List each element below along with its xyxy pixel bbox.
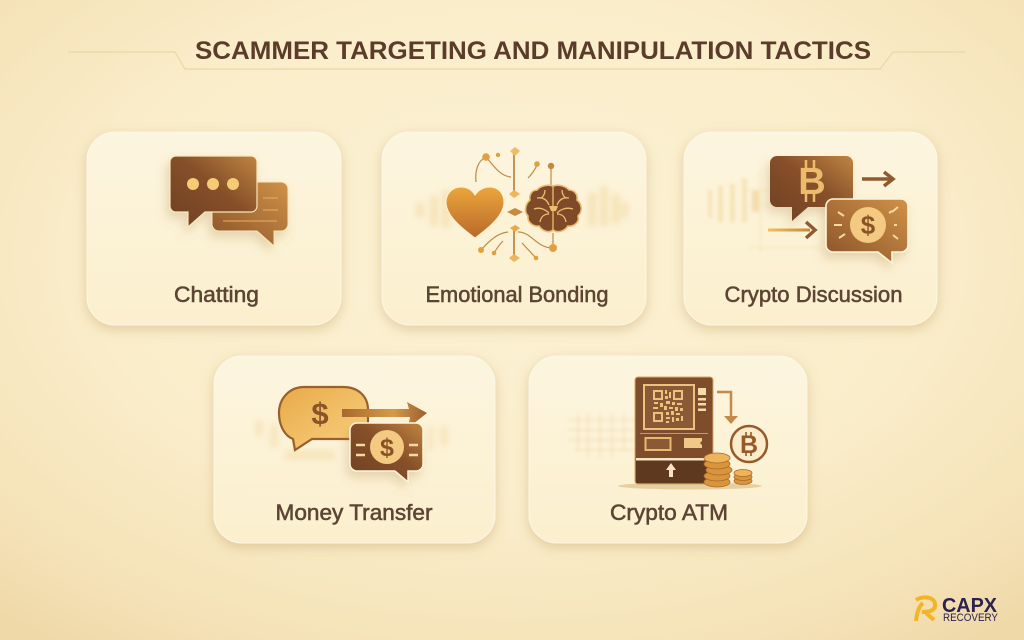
arrow: transfer (342, 402, 427, 428)
icon: gold dollar bubble (279, 387, 368, 450)
label: money transfer: Money Transfer (276, 500, 432, 525)
decorative grid (568, 413, 635, 458)
decorative glow waves (416, 186, 628, 228)
logo: capx recovery (916, 595, 999, 624)
panel: crypto discussion (684, 132, 937, 325)
decorative glow waves (255, 420, 448, 460)
heart (446, 187, 504, 238)
arrow: right top (862, 172, 893, 186)
qr code (653, 390, 683, 423)
icon: bitcoin coin: B (740, 431, 758, 459)
icon: coin stacks (704, 453, 752, 487)
label: chatting: Chatting (174, 282, 259, 307)
icon: gold dollar bubble: $ (311, 396, 329, 431)
panel: crypto atm (529, 356, 807, 543)
title banner (68, 37, 965, 69)
label: emotional bonding: Emotional Bonding (426, 282, 608, 307)
icon: heart and brain network (446, 147, 581, 262)
arrow: right lower (768, 222, 815, 238)
arrow: down (717, 392, 738, 424)
icon: bitcoin bubble: B (798, 161, 826, 203)
icon: dark dollar bubble (350, 423, 423, 482)
label: crypto discussion: Crypto Discussion (724, 282, 902, 307)
panel: chatting (87, 132, 341, 325)
panel: emotional bonding (382, 132, 646, 325)
nodes (478, 147, 557, 262)
label: crypto atm: Crypto ATM (610, 500, 728, 525)
icon: dark dollar bubble: $ (380, 434, 394, 462)
icon: atm machine (635, 377, 713, 484)
logo wordmark: CAPX (942, 595, 998, 617)
logo mark (916, 597, 935, 621)
title: SCAMMER TARGETING AND MANIPULATION TACTICS (195, 37, 871, 65)
logo subtitle: RECOVERY (943, 612, 999, 624)
floor shadow (618, 482, 762, 490)
icon: dollar bubble: $ (861, 210, 876, 240)
brain (526, 185, 581, 232)
icon: bitcoin bubble (770, 156, 853, 221)
panel: money transfer (214, 356, 495, 543)
side buttons (698, 388, 706, 411)
icon: bitcoin coin (731, 426, 767, 462)
icon: chat bubbles (170, 156, 288, 246)
decorative candlestick chart (708, 172, 824, 252)
connector lines (476, 152, 553, 258)
icon: dollar bubble (826, 199, 908, 263)
